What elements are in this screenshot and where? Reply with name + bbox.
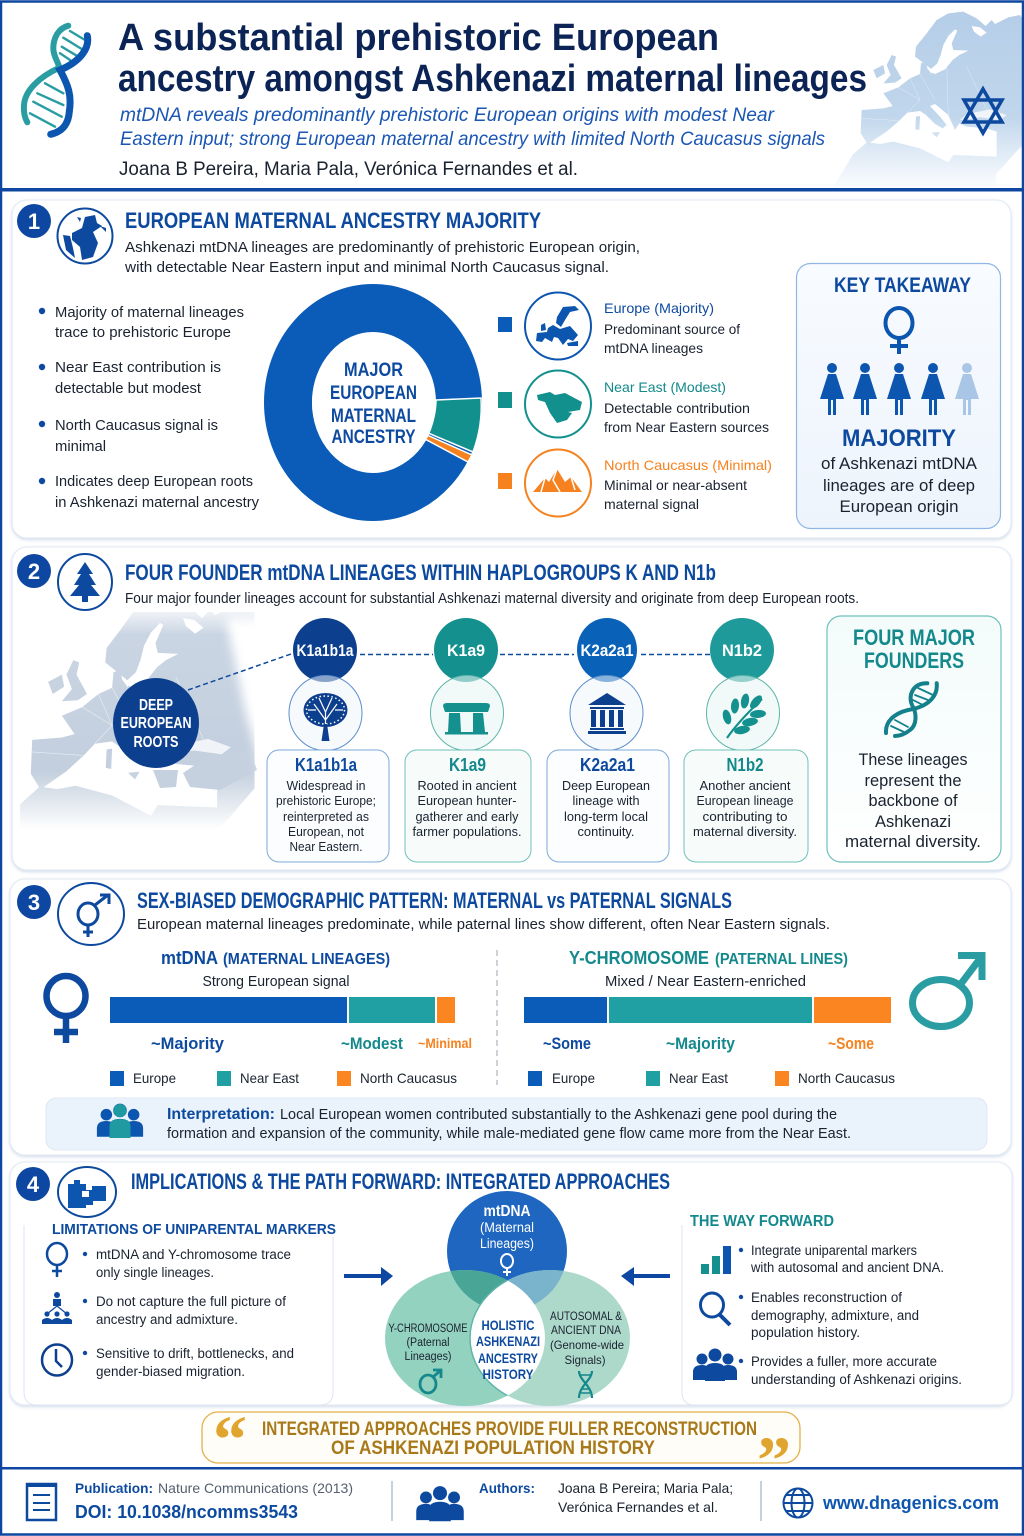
icon: magnifier bbox=[700, 1293, 730, 1325]
interpretation box bbox=[46, 1098, 987, 1150]
website: www.dnagenics.com bbox=[822, 1493, 999, 1513]
quote text: OF ASHKENAZI POPULATION HISTORY bbox=[331, 1438, 655, 1459]
founder K1a1b1a: European, not bbox=[288, 824, 364, 839]
bullet list: minimal bbox=[55, 438, 106, 455]
founder K1a1b1a: K1a1b1a bbox=[296, 641, 354, 660]
Venn diagram: HISTORY bbox=[482, 1366, 534, 1382]
Venn diagram: Signals) bbox=[564, 1353, 606, 1367]
mtDNA chart: ~Modest bbox=[341, 1034, 403, 1053]
Venn diagram: HOLISTIC bbox=[482, 1317, 534, 1333]
panel 1: European maternal ancestry majority bbox=[12, 200, 1011, 538]
Venn diagram: ANCESTRY bbox=[478, 1350, 539, 1366]
icon: clock bbox=[42, 1344, 72, 1376]
founder K1a9: Rooted in ancient bbox=[418, 778, 517, 793]
bullet list: Majority of maternal lineages bbox=[55, 304, 244, 321]
description: Four major founder lineages account for substantial Ashkenazi maternal diversity and originate from deep European roots. bbox=[125, 591, 859, 607]
key takeaway card: of Ashkenazi mtDNA bbox=[821, 454, 978, 473]
mtDNA chart: Near East bbox=[240, 1070, 299, 1086]
deep European roots circle: ROOTS bbox=[134, 734, 179, 751]
legend: Europe: Predominant source of bbox=[604, 321, 740, 337]
founder K1a9 bbox=[405, 618, 531, 862]
limitations panel: ancestry and admixture. bbox=[96, 1312, 238, 1327]
Y-chromosome chart bbox=[524, 948, 895, 1086]
founder K1a9: European hunter- bbox=[418, 793, 516, 808]
mtDNA chart: North Caucasus bbox=[360, 1070, 457, 1086]
key takeaway card: European origin bbox=[840, 497, 958, 516]
subtitle: Eastern input; strong European maternal ancestry with limited North Caucasus signals bbox=[120, 129, 825, 150]
badge 3 bbox=[17, 885, 51, 919]
Y-chromosome chart: ~Some bbox=[543, 1034, 591, 1053]
way forward panel: demography, admixture, and bbox=[751, 1308, 919, 1323]
subtitle bbox=[120, 105, 825, 150]
legend: Europe: Europe (Majority) bbox=[604, 300, 714, 316]
founder N1b2: maternal diversity. bbox=[693, 824, 797, 839]
way forward panel: Integrate uniparental markers bbox=[751, 1243, 917, 1258]
title bbox=[118, 17, 867, 100]
Y-chromosome chart: North Caucasus bbox=[798, 1070, 895, 1086]
heading: FOUR FOUNDER mtDNA LINEAGES WITHIN HAPLOGROUPS K AND N1b bbox=[125, 560, 716, 585]
divider bbox=[496, 950, 498, 1085]
icon: people group bbox=[97, 1104, 143, 1138]
icon: star of David bbox=[964, 89, 1002, 133]
founder K1a9: gatherer and early bbox=[416, 809, 519, 824]
subtitle: mtDNA reveals predominantly prehistoric European origins with modest Near bbox=[120, 105, 775, 126]
footer rule bbox=[0, 1467, 1024, 1470]
donut chart: EUROPEAN bbox=[330, 383, 417, 404]
legend: Europe: mtDNA lineages bbox=[604, 340, 703, 356]
icon: large female symbol bbox=[46, 976, 86, 1043]
mtDNA chart: ~Minimal bbox=[418, 1035, 472, 1051]
icon: document bbox=[27, 1484, 56, 1520]
way forward panel: population history. bbox=[751, 1325, 860, 1340]
Venn diagram: mtDNA bbox=[484, 1203, 531, 1220]
founder N1b2: European lineage bbox=[696, 793, 794, 808]
limitations panel: gender-biased migration. bbox=[96, 1364, 245, 1379]
panel 2: four founder lineages bbox=[0, 547, 1011, 870]
donut chart: MAJOR bbox=[344, 360, 403, 381]
interpretation box: Local European women contributed substantially to the Ashkenazi gene pool during the bbox=[280, 1107, 837, 1123]
badge 1 bbox=[17, 204, 51, 238]
header map of Europe bbox=[833, 12, 1024, 187]
panel 3: sex-biased pattern bbox=[10, 879, 1011, 1155]
Venn diagram: AUTOSOMAL & bbox=[550, 1309, 622, 1323]
description: European maternal lineages predominate, while paternal lines show different, often Near Eastern signals. bbox=[137, 916, 830, 933]
key takeaway card bbox=[796, 264, 1000, 528]
icon: small DNA bbox=[579, 1371, 592, 1398]
heading: IMPLICATIONS & THE PATH FORWARD: INTEGRATED APPROACHES bbox=[131, 1169, 670, 1194]
badge 4: 4 bbox=[27, 1172, 40, 1197]
Y-chromosome chart: Mixed / Near Eastern-enriched bbox=[605, 973, 806, 990]
icon: oak tree bbox=[304, 693, 348, 741]
legend: Near East: Near East (Modest) bbox=[604, 379, 726, 395]
quote text: INTEGRATED APPROACHES PROVIDE FULLER RECONSTRUCTION bbox=[262, 1419, 757, 1440]
four major founders card: FOUNDERS bbox=[864, 648, 964, 673]
limitations panel: Do not capture the full picture of bbox=[96, 1294, 286, 1309]
icon: bar chart bbox=[701, 1246, 731, 1274]
legend: Near East bbox=[498, 370, 769, 438]
Venn diagram: Y-CHROMOSOME bbox=[388, 1323, 468, 1335]
bullet list: Near East contribution is bbox=[55, 359, 221, 376]
authors bbox=[479, 1480, 733, 1515]
icon: lineage tree bbox=[42, 1292, 72, 1324]
founder K1a9: K1a9 bbox=[449, 755, 486, 775]
deep European roots circle: DEEP bbox=[139, 697, 173, 714]
badge 1: 1 bbox=[28, 209, 40, 234]
bullet list: detectable but modest bbox=[55, 380, 202, 397]
icon: small female symbol bbox=[501, 1254, 513, 1276]
founder K2a2a1: Deep European bbox=[562, 778, 650, 793]
founder N1b2: N1b2 bbox=[722, 641, 762, 660]
quote banner bbox=[202, 1401, 800, 1498]
bullet list: in Ashkenazi maternal ancestry bbox=[55, 494, 259, 511]
donut chart: ANCESTRY bbox=[332, 427, 416, 448]
Venn diagram: Lineages) bbox=[480, 1236, 534, 1251]
description: with detectable Near Eastern input and minimal North Caucasus signal. bbox=[124, 259, 609, 276]
Venn diagram: ASHKENAZI bbox=[476, 1333, 540, 1349]
icon: people bbox=[693, 1348, 737, 1381]
way forward panel: Provides a fuller, more accurate bbox=[751, 1354, 937, 1369]
Venn diagram: (Maternal bbox=[480, 1220, 534, 1235]
mtDNA chart: ~Majority bbox=[151, 1034, 225, 1053]
closing quote mark: ” bbox=[757, 1422, 791, 1498]
authors: Verónica Fernandes et al. bbox=[558, 1499, 718, 1515]
bullet list: North Caucasus signal is bbox=[55, 417, 218, 434]
icon: female symbol bbox=[47, 1243, 67, 1277]
bullet list: trace to prehistoric Europe bbox=[55, 324, 231, 341]
heading: SEX-BIASED DEMOGRAPHIC PATTERN: MATERNAL vs PATERNAL SIGNALS bbox=[137, 888, 732, 913]
Y-chromosome chart: Near East bbox=[669, 1070, 728, 1086]
description: Ashkenazi mtDNA lineages are predominantly of prehistoric European origin, bbox=[125, 239, 640, 256]
key takeaway card: KEY TAKEAWAY bbox=[834, 274, 971, 297]
mtDNA chart bbox=[110, 948, 472, 1086]
limitations panel: LIMITATIONS OF UNIPARENTAL MARKERS bbox=[52, 1221, 336, 1238]
Venn diagram: ANCIENT DNA bbox=[551, 1323, 621, 1337]
deep European roots circle: EUROPEAN bbox=[120, 715, 192, 732]
publication: DOI: 10.1038/ncomms3543 bbox=[75, 1502, 298, 1522]
founder K1a9: farmer populations. bbox=[412, 824, 522, 839]
four major founders card bbox=[827, 616, 1001, 862]
authors: Joana B Pereira, Maria Pala, Verónica Fernandes et al. bbox=[119, 159, 578, 180]
publication bbox=[75, 1480, 353, 1522]
title: A substantial prehistoric European bbox=[118, 17, 719, 59]
legend: Near East: Detectable contribution bbox=[604, 400, 750, 416]
four major founders card: Ashkenazi bbox=[875, 812, 951, 831]
heading: EUROPEAN MATERNAL ANCESTRY MAJORITY bbox=[125, 208, 541, 233]
mtDNA chart: (MATERNAL LINEAGES) bbox=[223, 951, 390, 968]
icon: female symbol bbox=[886, 308, 912, 354]
founder K1a9: K1a9 bbox=[447, 641, 485, 660]
key takeaway card: lineages are of deep bbox=[823, 476, 975, 495]
founder N1b2 bbox=[684, 618, 808, 862]
legend: Near East: from Near Eastern sources bbox=[604, 419, 769, 435]
icon: large male symbol bbox=[912, 956, 982, 1026]
footer bbox=[27, 1480, 999, 1522]
badge 3: 3 bbox=[28, 890, 40, 915]
badge 2 bbox=[17, 554, 51, 588]
badge 2: 2 bbox=[28, 559, 40, 584]
legend: North Caucasus: Minimal or near-absent bbox=[604, 477, 747, 493]
icon: tree bbox=[58, 554, 112, 610]
arrow: way forward to Venn bbox=[621, 1267, 670, 1286]
founder K2a2a1: K2a2a1 bbox=[580, 641, 634, 660]
founder K1a1b1a: Widespread in bbox=[286, 778, 366, 793]
founder K1a1b1a bbox=[267, 618, 389, 862]
panel 4: implications bbox=[10, 1162, 1012, 1406]
authors: Authors: bbox=[479, 1480, 535, 1496]
opening quote mark: “ bbox=[213, 1401, 247, 1477]
founder K2a2a1: lineage with bbox=[572, 793, 640, 808]
founder N1b2: contributing to bbox=[702, 809, 788, 824]
key takeaway card: MAJORITY bbox=[842, 425, 956, 452]
connector lines bbox=[188, 654, 710, 690]
four major founders card: maternal diversity. bbox=[845, 832, 981, 851]
Y-chromosome chart: ~Some bbox=[828, 1034, 874, 1053]
icon: authors group bbox=[416, 1486, 464, 1521]
Venn diagram bbox=[385, 1191, 630, 1406]
founder N1b2: Another ancient bbox=[700, 778, 791, 793]
Venn diagram: (Genome-wide bbox=[550, 1338, 624, 1352]
icon: small male symbol bbox=[420, 1370, 441, 1393]
mtDNA chart: mtDNA bbox=[161, 948, 218, 968]
publication: Publication: bbox=[75, 1480, 153, 1496]
title: ancestry amongst Ashkenazi maternal lineages bbox=[118, 58, 867, 100]
limitations panel: only single lineages. bbox=[96, 1265, 214, 1280]
legend: North Caucasus: maternal signal bbox=[604, 496, 699, 512]
publication: Nature Communications (2013) bbox=[158, 1480, 353, 1496]
founder K2a2a1: continuity. bbox=[578, 824, 634, 839]
four major founders card: These lineages bbox=[858, 750, 968, 769]
limitations panel bbox=[24, 1221, 336, 1405]
way forward panel: understanding of Ashkenazi origins. bbox=[751, 1372, 962, 1387]
limitations panel: Sensitive to drift, bottlenecks, and bbox=[96, 1346, 294, 1361]
icon: globe bbox=[58, 208, 112, 264]
four major founders card: represent the bbox=[864, 771, 962, 790]
founder K1a1b1a: prehistoric Europe; bbox=[276, 793, 376, 808]
arrow: limitations to Venn bbox=[344, 1267, 393, 1286]
way forward panel: Enables reconstruction of bbox=[751, 1290, 902, 1305]
badge 4 bbox=[16, 1167, 50, 1201]
quote text bbox=[262, 1419, 757, 1459]
founder K1a1b1a: Near Eastern. bbox=[290, 839, 362, 854]
limitations panel: mtDNA and Y-chromosome trace bbox=[96, 1247, 291, 1262]
legend: Europe bbox=[498, 292, 740, 360]
way forward panel: with autosomal and ancient DNA. bbox=[750, 1260, 944, 1275]
interpretation box: formation and expansion of the community, while male-mediated gene flow came more from the Near East. bbox=[167, 1126, 851, 1142]
header rule bbox=[0, 188, 1024, 192]
bullet list bbox=[39, 304, 259, 511]
icon: leaf branch bbox=[721, 693, 766, 738]
Venn diagram: Lineages) bbox=[404, 1351, 452, 1363]
bullet list: Indicates deep European roots bbox=[55, 473, 253, 490]
header bbox=[24, 12, 1024, 187]
legend: North Caucasus bbox=[498, 450, 772, 516]
description bbox=[124, 239, 640, 276]
Y-chromosome chart: Y-CHROMOSOME bbox=[569, 948, 709, 968]
icon: globe bbox=[784, 1488, 812, 1518]
mtDNA chart: Strong European signal bbox=[202, 973, 350, 990]
founder N1b2: N1b2 bbox=[726, 755, 764, 775]
legend: North Caucasus: North Caucasus (Minimal) bbox=[604, 457, 772, 473]
donut chart: MATERNAL bbox=[331, 406, 416, 427]
icon row: five women bbox=[820, 363, 979, 415]
icon: DNA bbox=[886, 683, 937, 736]
authors: Joana B Pereira; Maria Pala; bbox=[558, 1480, 733, 1496]
way forward panel: THE WAY FORWARD bbox=[690, 1213, 834, 1230]
four major founders card: backbone of bbox=[868, 791, 958, 810]
icon: temple bbox=[588, 693, 626, 734]
Y-chromosome chart: Europe bbox=[552, 1070, 595, 1086]
icon: dolmen bbox=[443, 703, 490, 734]
way forward panel bbox=[682, 1213, 1012, 1405]
interpretation box: Interpretation: bbox=[167, 1106, 275, 1123]
four major founders card: FOUR MAJOR bbox=[853, 625, 975, 650]
Y-chromosome chart: ~Majority bbox=[666, 1034, 735, 1053]
icon: male and female symbols bbox=[58, 883, 124, 945]
donut chart bbox=[288, 308, 481, 497]
map of Europe bbox=[20, 612, 257, 822]
founder K2a2a1: long-term local bbox=[564, 809, 648, 824]
icon: DNA helix bbox=[24, 26, 88, 134]
founder K1a1b1a: reinterpreted as bbox=[283, 809, 369, 824]
icon: puzzle pieces bbox=[58, 1167, 116, 1217]
Y-chromosome chart: (PATERNAL LINES) bbox=[715, 951, 848, 968]
deep European roots circle bbox=[113, 678, 199, 768]
founder K2a2a1: K2a2a1 bbox=[580, 755, 635, 775]
mtDNA chart: Europe bbox=[133, 1070, 176, 1086]
Venn diagram: (Paternal bbox=[406, 1337, 450, 1349]
founder K1a1b1a: K1a1b1a bbox=[295, 755, 358, 775]
founder K2a2a1 bbox=[547, 618, 669, 862]
